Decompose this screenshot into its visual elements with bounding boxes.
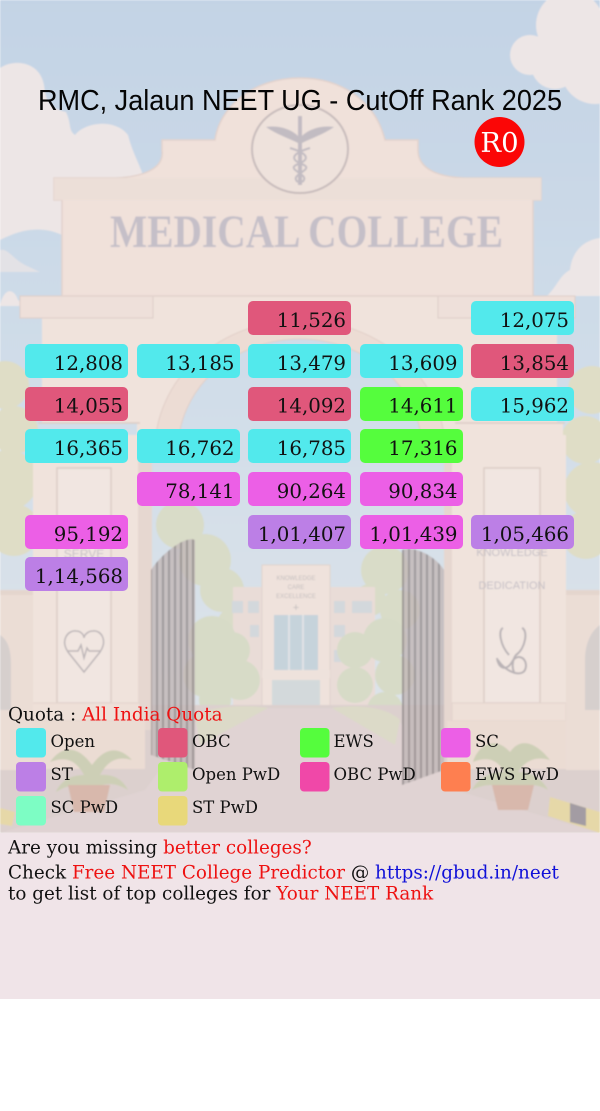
row 5 [137,472,463,506]
inner trees behind building [156,501,420,643]
legend: EWS PwD [441,762,559,792]
promo line 3: to get list of top colleges for Your NEET Rank [8,884,434,904]
distant building: + [293,602,299,614]
row 6: 1,05,466 [481,523,569,546]
promo line 1: Are you missing better colleges? [7,838,312,858]
row 6: 95,192 [54,523,123,546]
quota line: Quota : All India Quota [8,704,223,726]
curbs [0,797,600,833]
legend: SC PwD [16,796,118,826]
legend: SC PwD: SC PwD [50,798,118,817]
distant building: CARE [288,585,304,591]
row 4 [25,429,463,463]
legend: SC [441,728,499,758]
row 7 [25,557,128,591]
promo panel [0,833,600,999]
medallion [252,105,348,193]
legend: OBC PwD [300,762,416,792]
front trees and hedges [183,616,415,728]
row 2: 13,479 [277,352,346,375]
row 1 [248,301,574,335]
row 4: 17,316 [388,437,458,460]
row 3: 15,962 [500,394,569,418]
round badge [474,117,524,167]
row 5: 78,141 [165,480,234,503]
row 5: 90,264 [277,480,346,503]
row 2: 12,808 [54,352,123,375]
legend: OBC [158,728,231,758]
legend: EWS PwD: EWS PwD [475,765,559,784]
arch wall with piers [42,296,563,450]
background: medical college gate illustration: DEDICATION [478,580,546,592]
ground and road [0,705,600,833]
row 3: 14,611 [388,394,458,418]
row 5: 90,834 [388,480,458,503]
round badge: R0 [480,127,519,159]
legend: ST PwD [158,796,258,826]
row 3: 14,092 [277,394,346,418]
legend: Open PwD [158,762,280,792]
trees at far sides [0,361,600,559]
row 4: 16,785 [277,437,346,460]
row 7: 1,14,568 [35,565,123,588]
gate heading engraved: MEDICAL COLLEGE [110,206,503,258]
row 4: 16,365 [54,437,123,460]
icon: stethoscope [497,628,526,673]
row 2: 13,854 [500,352,569,375]
row 2: 13,185 [165,352,234,375]
row 2 [25,344,574,378]
row 3: 14,055 [54,394,123,418]
promo line 2: Check Free NEET College Predictor @ https://gbud.in/neet [8,862,560,884]
cutoff rank grid [25,301,574,591]
upper parapet [54,78,541,296]
row 1: 12,075 [500,309,569,332]
pier panels [38,423,565,703]
legend [16,728,559,826]
distant building [232,565,375,710]
engraved pier words: SERVE [64,547,104,561]
legend: Open: Open [50,732,95,751]
legend: Open [16,728,95,758]
title: RMC, Jalaun NEET UG - CutOff Rank 2025 [38,85,562,117]
lower piers [33,435,138,705]
potted plants [50,743,550,812]
outer side walls [0,590,33,770]
distant building: EXCELLENCE [276,594,316,600]
legend: ST [16,762,73,792]
legend: ST: ST [50,765,73,784]
distant building: KNOWLEDGE [276,576,316,582]
legend: ST PwD: ST PwD [192,798,258,817]
background: medical college gate illustration: KNOWLEDGE [476,547,548,559]
side wall arched windows [0,625,600,710]
background: medical college gate illustration [0,0,600,833]
row 3 [25,387,574,421]
gates [151,539,444,785]
legend: Open PwD: Open PwD [192,765,280,784]
legend: OBC PwD: OBC PwD [334,765,416,784]
legend: EWS: EWS [334,732,374,751]
legend: OBC: OBC [192,732,231,751]
row 4: 16,762 [165,437,234,460]
icon: heart [65,631,104,672]
sky [0,0,600,720]
legend: EWS [300,728,374,758]
row 6 [25,515,574,549]
row 2: 13,609 [388,352,458,375]
row 6: 1,01,407 [258,523,346,546]
row 6: 1,01,439 [369,523,458,546]
legend: SC: SC [475,732,499,751]
clouds [0,0,600,306]
row 1: 11,526 [277,309,346,332]
